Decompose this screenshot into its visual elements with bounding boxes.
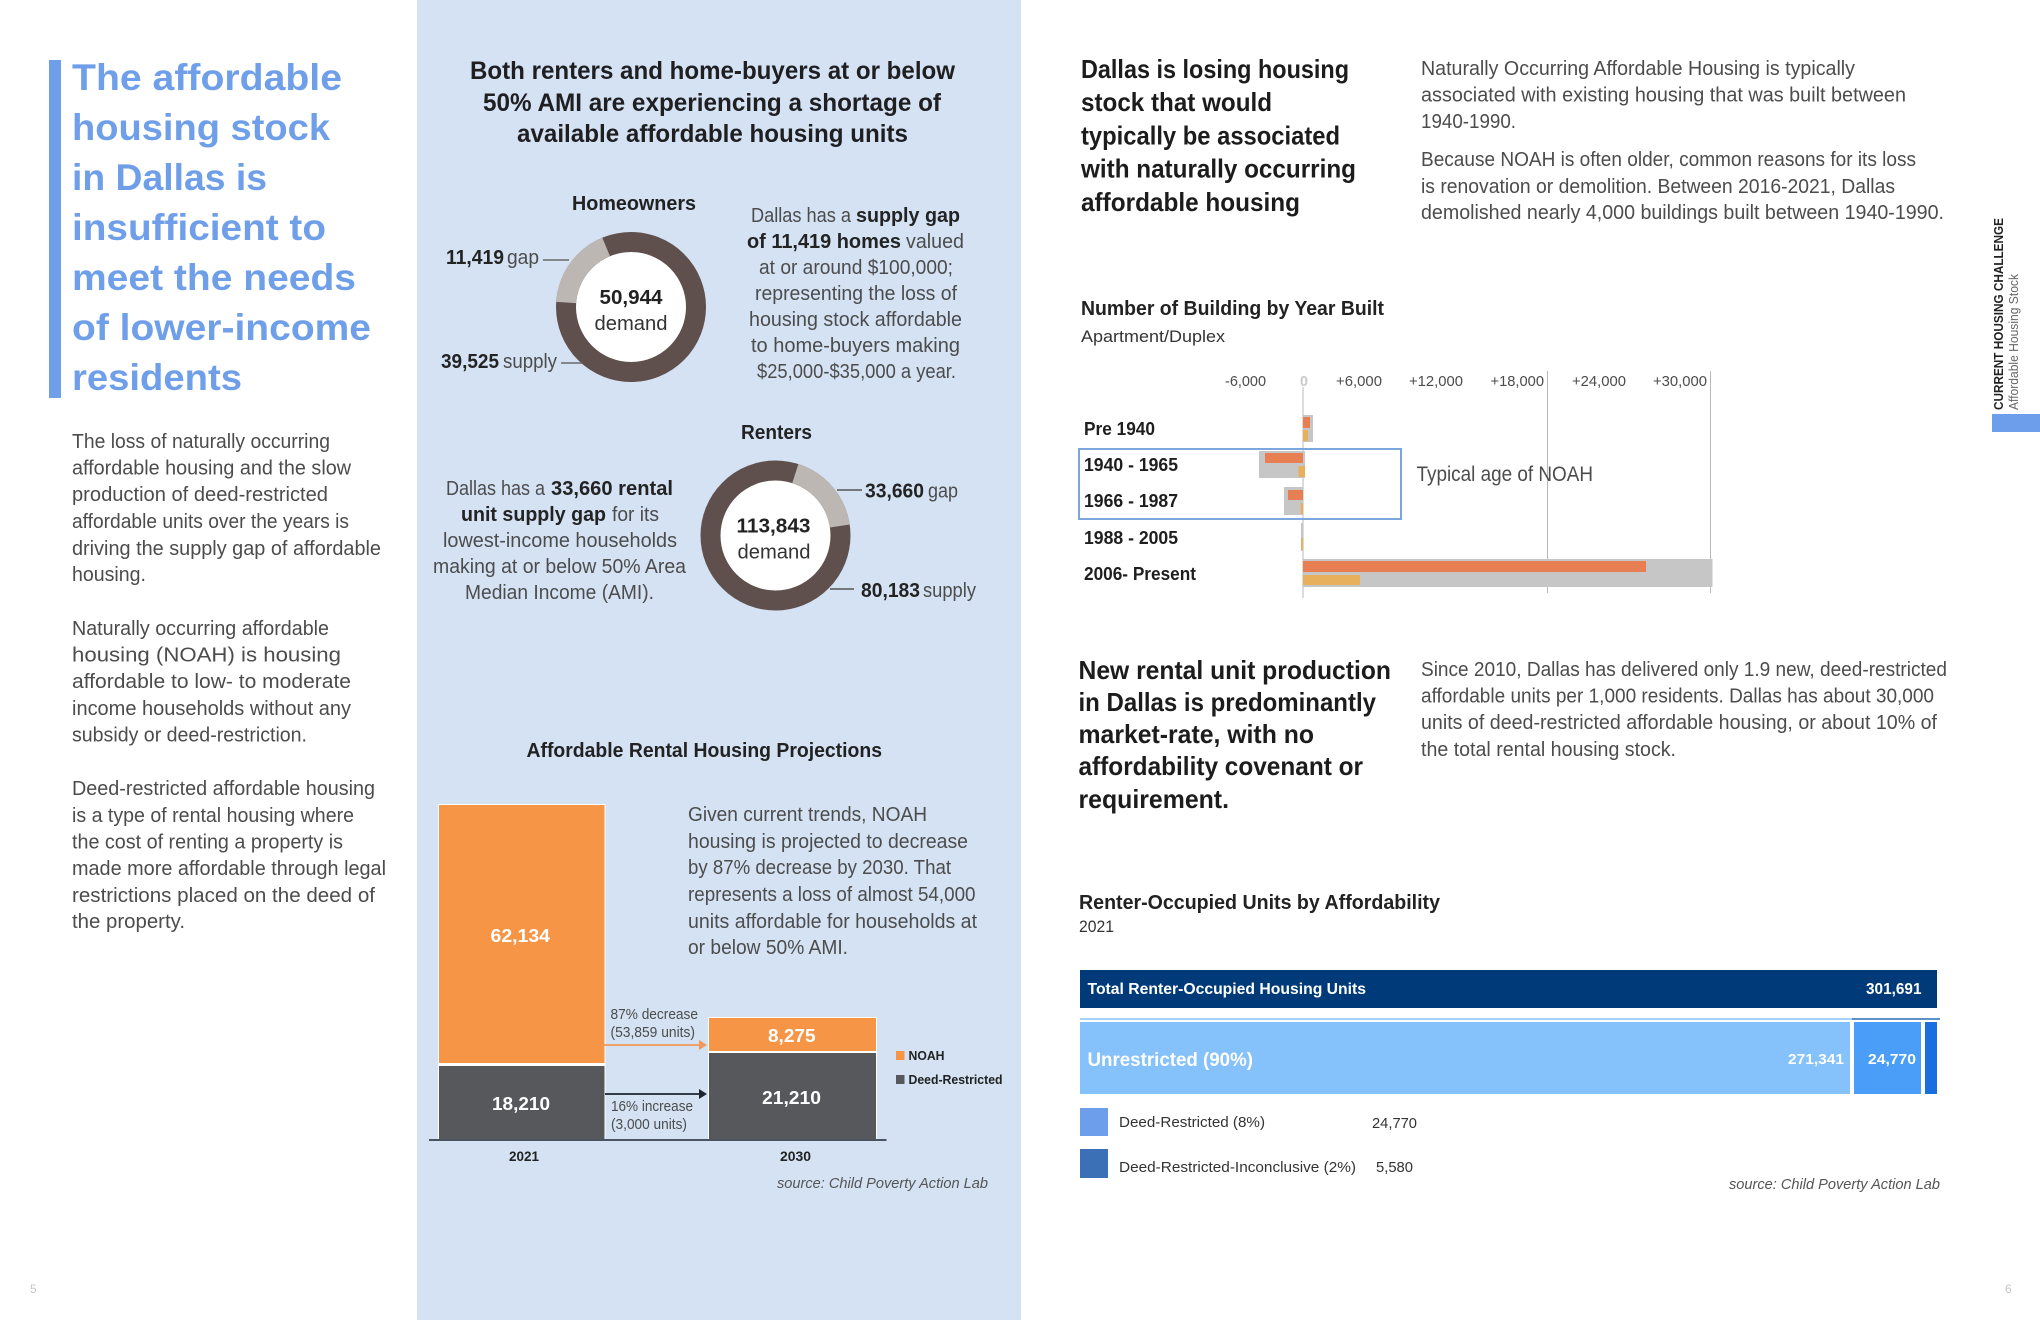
legend: deed-restricted: 24,770 xyxy=(1372,1115,1417,1132)
heading: renter-occupied chart xyxy=(1079,892,1441,936)
segment: deed-restricted inconclusive xyxy=(1925,1022,1937,1094)
source note: renter-occupied: source: Child Poverty Action Lab xyxy=(1729,1176,1940,1193)
title accent bar xyxy=(49,60,61,398)
text block: supply gap explanation: production of deed-restricted xyxy=(72,484,328,506)
heading: new rental production: affordability covenant or xyxy=(1078,751,1363,781)
stacked bar chart: renter-occupied units xyxy=(1080,970,1940,1094)
text block: deed-restricted definition: is a type of rental housing where xyxy=(72,805,354,827)
side tab: CURRENT HOUSING CHALLENGE xyxy=(1991,218,2006,410)
text block: homeowners supply gap: valued xyxy=(906,231,964,253)
text block: NOAH loss: Because NOAH is often older, common reasons for its loss xyxy=(1421,149,1916,171)
text block: NOAH age: Naturally Occurring Affordable Housing is typically xyxy=(1421,58,1855,80)
donut chart: homeowners: 50,944 xyxy=(600,287,663,309)
label: homeowners gap: 11,419 xyxy=(446,247,504,269)
text block: homeowners supply gap: $25,000-$35,000 a year. xyxy=(757,361,956,383)
text block: NOAH definition: income households without any xyxy=(72,698,351,720)
bar: 2021: 18,210 xyxy=(492,1094,550,1114)
text block: renters supply gap: 33,660 rental xyxy=(551,478,673,500)
text block: renters supply gap: making at or below 50% Area xyxy=(433,556,687,578)
title: in Dallas is xyxy=(72,157,267,198)
axis line xyxy=(429,1139,886,1141)
text block: renters supply gap: Median Income (AMI). xyxy=(465,582,654,604)
row: Pre 1940: Pre 1940 xyxy=(1084,419,1155,439)
text block: NOAH definition: subsidy or deed-restriction. xyxy=(72,724,307,746)
text block: deed-restricted delivery: Since 2010, Dallas has delivered only 1.9 new, deed-restricted xyxy=(1421,659,1947,681)
text block: deed-restricted definition xyxy=(72,778,386,933)
page number 6: 6 xyxy=(2005,1282,2012,1296)
row: 1966 - 1987: 1966 - 1987 xyxy=(1084,491,1178,511)
side tab xyxy=(1991,218,2040,432)
text block: deed-restricted delivery: the total rental housing stock. xyxy=(1421,739,1676,761)
label: renters supply: supply xyxy=(923,580,976,602)
bar: 2021: 62,134 xyxy=(490,926,550,946)
bar: 2030: 21,210 xyxy=(762,1088,821,1108)
label: renters supply xyxy=(830,580,976,602)
label: renters gap: 33,660 xyxy=(865,480,924,502)
bar: 2030: 8,275 xyxy=(768,1026,816,1046)
label: homeowners gap xyxy=(446,247,569,269)
axis labels: +18,000 xyxy=(1490,373,1544,390)
bar: total units: 301,691 xyxy=(1866,981,1922,998)
arrow: NOAH decrease: (53,859 units) xyxy=(610,1024,695,1041)
heading: renters: Renters xyxy=(741,422,812,444)
legend: deed-restricted: Deed-Restricted (8%) xyxy=(1119,1114,1265,1131)
title: residents xyxy=(72,357,242,398)
page number 5: 5 xyxy=(30,1282,37,1296)
heading: losing housing stock: with naturally occurring xyxy=(1080,154,1356,184)
segment: unrestricted: Unrestricted (90%) xyxy=(1088,1050,1253,1071)
text block: NOAH definition: affordable to low- to moderate xyxy=(72,671,351,693)
text block: deed-restricted delivery: affordable units per 1,000 residents. Dallas has about 30,000 xyxy=(1421,686,1934,708)
axis labels: 0 xyxy=(1300,373,1308,390)
text block: projection summary xyxy=(688,804,977,959)
text block: deed-restricted definition: made more affordable through legal xyxy=(72,858,386,880)
arrow: NOAH decrease xyxy=(604,1006,707,1050)
axis label 2021: 2021 xyxy=(509,1148,539,1164)
text block: supply gap explanation: housing. xyxy=(72,564,146,586)
panel background xyxy=(417,0,1021,1320)
row: 2006- Present: 2006- Present xyxy=(1084,564,1196,584)
text block: homeowners supply gap: to home-buyers making xyxy=(751,335,960,357)
text block: renters supply gap xyxy=(433,478,687,604)
title xyxy=(72,57,371,398)
text block: renters supply gap: lowest-income households xyxy=(443,530,677,552)
segment: deed-restricted: 24,770 xyxy=(1868,1051,1916,1068)
text block: homeowners supply gap: of 11,419 homes xyxy=(747,231,901,253)
arrow: deed-restricted increase xyxy=(605,1089,707,1133)
title: of lower-income xyxy=(72,307,371,348)
heading: shortage: 50% AMI are experiencing a shortage of xyxy=(483,89,942,117)
heading: shortage xyxy=(470,57,956,148)
heading: renter-occupied chart: Renter-Occupied Units by Affordability xyxy=(1079,892,1441,914)
title: meet the needs xyxy=(72,257,356,298)
highlight box: typical age of NOAH xyxy=(1079,449,1401,519)
legend: projections: Deed-Restricted xyxy=(908,1072,1003,1087)
heading: new rental production: market-rate, with no xyxy=(1078,719,1314,749)
text block: renters supply gap: Dallas has a xyxy=(446,478,546,500)
donut chart: homeowners: demand xyxy=(594,313,668,335)
label: renters gap: gap xyxy=(928,480,958,502)
axis labels: +24,000 xyxy=(1572,373,1626,390)
heading: renter-occupied chart: 2021 xyxy=(1079,917,1114,936)
text block: projection summary: or below 50% AMI. xyxy=(688,937,848,959)
text block: deed-restricted delivery xyxy=(1421,659,1947,761)
text block: renters supply gap: unit supply gap xyxy=(461,504,606,526)
bar: 2030 xyxy=(708,1017,877,1139)
row: 1988 - 2005: 1988 - 2005 xyxy=(1084,528,1178,548)
row: 2006- Present xyxy=(1084,559,1712,587)
label: homeowners gap: gap xyxy=(507,247,539,269)
text block: homeowners supply gap: supply gap xyxy=(856,205,960,227)
arrow: deed-restricted increase: (3,000 units) xyxy=(611,1116,687,1133)
text block: homeowners supply gap: housing stock affordable xyxy=(749,309,962,331)
bar: total units: Total Renter-Occupied Housing Units xyxy=(1088,981,1366,998)
legend: deed-restricted inconclusive: Deed-Restricted-Inconclusive (2%) xyxy=(1119,1159,1356,1176)
text block: supply gap explanation: The loss of naturally occurring xyxy=(72,431,330,453)
text block: supply gap explanation: driving the supply gap of affordable xyxy=(72,538,381,560)
title: insufficient to xyxy=(72,207,326,248)
title: housing stock xyxy=(72,107,330,148)
text block: NOAH age: 1940-1990. xyxy=(1421,111,1516,133)
text block: deed-restricted definition: restrictions placed on the deed of xyxy=(72,885,375,907)
panel: left column introduction xyxy=(30,57,386,1296)
text block: deed-restricted definition: Deed-restricted affordable housing xyxy=(72,778,375,800)
heading: buildings chart: Apartment/Duplex xyxy=(1081,327,1226,346)
text block: projection summary: housing is projected to decrease xyxy=(688,831,968,853)
heading: new rental production: in Dallas is predominantly xyxy=(1078,687,1376,717)
panel: right column xyxy=(1078,54,2040,1296)
bar: total units xyxy=(1080,970,1937,1008)
heading: losing housing stock: typically be associated xyxy=(1081,120,1340,150)
text block: deed-restricted definition: the property. xyxy=(72,911,185,933)
axis labels: +6,000 xyxy=(1336,373,1382,390)
title: The affordable xyxy=(72,57,342,98)
text block: NOAH age xyxy=(1421,58,1906,133)
source note: projections: source: Child Poverty Action Lab xyxy=(777,1175,988,1192)
heading: new rental production: requirement. xyxy=(1078,784,1229,814)
grid lines xyxy=(1303,371,1710,598)
heading: new rental production: New rental unit production xyxy=(1078,655,1391,685)
heading: rental housing projections: Affordable Rental Housing Projections xyxy=(526,740,882,762)
row: Pre 1940 xyxy=(1084,415,1313,442)
arrow: deed-restricted increase: 16% increase xyxy=(611,1098,693,1115)
row: 1940 - 1965: 1940 - 1965 xyxy=(1084,455,1178,475)
side tab: Affordable Housing Stock xyxy=(2006,274,2021,410)
segment: unrestricted xyxy=(1080,1022,1850,1094)
row: 1966 - 1987 xyxy=(1084,487,1303,515)
axis label 2030: 2030 xyxy=(780,1148,811,1164)
text block: projection summary: units affordable for households at xyxy=(688,911,977,933)
text block: supply gap explanation xyxy=(72,431,381,586)
annotation: typical age of NOAH: Typical age of NOAH xyxy=(1416,463,1593,486)
heading: losing housing stock xyxy=(1080,54,1356,217)
row: 1940 - 1965 xyxy=(1084,451,1305,478)
text block: NOAH loss: is renovation or demolition. Between 2016-2021, Dallas xyxy=(1421,176,1895,198)
axis labels: +12,000 xyxy=(1409,373,1463,390)
axis labels xyxy=(1225,373,1707,390)
text block: homeowners supply gap: representing the loss of xyxy=(755,283,957,305)
legend: projections xyxy=(896,1048,1003,1087)
text block: NOAH age: associated with existing housing that was built between xyxy=(1421,84,1906,106)
heading: buildings chart: Number of Building by Year Built xyxy=(1081,298,1384,320)
diverging bar chart: buildings by year built xyxy=(1079,371,1712,598)
donut chart: renters: 113,843 xyxy=(736,516,810,538)
text block: NOAH definition: Naturally occurring affordable xyxy=(72,618,329,640)
text block: projection summary: by 87% decrease by 2030. That xyxy=(688,857,951,879)
heading: losing housing stock: Dallas is losing housing xyxy=(1081,54,1349,84)
heading: buildings chart xyxy=(1081,298,1384,346)
heading: new rental production xyxy=(1078,655,1391,814)
text block: homeowners supply gap: at or around $100,000; xyxy=(759,257,953,279)
bar: 2021 xyxy=(438,804,606,1139)
heading: losing housing stock: affordable housing xyxy=(1081,187,1300,217)
legend: deed-restricted inconclusive: 5,580 xyxy=(1376,1159,1413,1176)
heading: homeowners: Homeowners xyxy=(572,193,696,215)
text block: NOAH definition xyxy=(72,618,351,746)
donut chart: renters: demand xyxy=(738,542,810,564)
segment: deed-restricted xyxy=(1854,1022,1921,1094)
label: renters gap xyxy=(837,480,958,502)
heading: shortage: Both renters and home-buyers at or below xyxy=(470,57,956,85)
segment: unrestricted: 271,341 xyxy=(1788,1051,1844,1068)
text block: homeowners supply gap: Dallas has a xyxy=(751,205,852,227)
text block: renters supply gap: for its xyxy=(612,504,659,526)
legend: deed-restricted inconclusive xyxy=(1080,1149,1413,1178)
label: homeowners supply xyxy=(441,351,582,373)
text block: deed-restricted delivery: units of deed-restricted affordable housing, or about 10% of xyxy=(1421,712,1937,734)
text block: supply gap explanation: affordable housing and the slow xyxy=(72,458,352,480)
heading: shortage: available affordable housing units xyxy=(517,120,908,148)
label: homeowners supply: 39,525 xyxy=(441,351,499,373)
stacked bar chart: projections xyxy=(429,804,886,1164)
donut chart: renters xyxy=(710,470,840,600)
text block: projection summary: represents a loss of almost 54,000 xyxy=(688,884,976,906)
heading: losing housing stock: stock that would xyxy=(1081,87,1272,117)
bracket line xyxy=(1080,1018,1852,1020)
label: renters supply: 80,183 xyxy=(861,580,920,602)
text block: supply gap explanation: affordable units over the years is xyxy=(72,511,349,533)
text block: homeowners supply gap xyxy=(747,205,964,383)
axis labels: -6,000 xyxy=(1225,373,1266,390)
text block: deed-restricted definition: the cost of renting a property is xyxy=(72,832,343,854)
text block: NOAH loss xyxy=(1421,149,1944,224)
legend: deed-restricted xyxy=(1080,1108,1417,1136)
panel: blue center column xyxy=(417,0,1021,1320)
text block: NOAH loss: demolished nearly 4,000 buildings built between 1940-1990. xyxy=(1421,202,1944,224)
label: homeowners supply: supply xyxy=(503,351,557,373)
arrow: NOAH decrease: 87% decrease xyxy=(610,1006,698,1023)
text block: projection summary: Given current trends, NOAH xyxy=(688,804,927,826)
donut chart: homeowners xyxy=(566,242,696,372)
text block: NOAH definition: housing (NOAH) is housing xyxy=(72,644,341,666)
legend: projections: NOAH xyxy=(908,1048,944,1063)
axis labels: +30,000 xyxy=(1653,373,1707,390)
